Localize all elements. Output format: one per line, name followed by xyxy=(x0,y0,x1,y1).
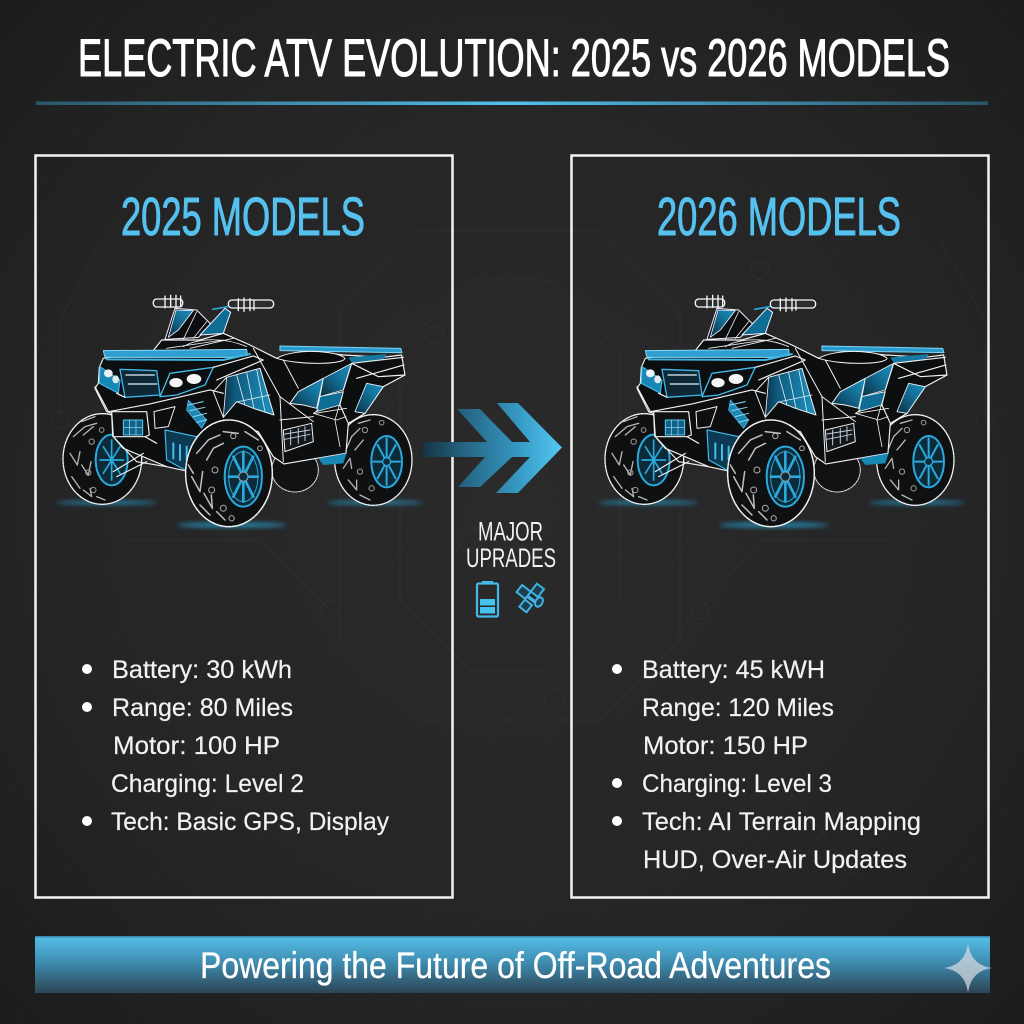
spec list 2025: Motor: 100 HP xyxy=(113,732,280,760)
illustration: 2025 ATV xyxy=(57,295,423,528)
arrow: upgrade direction xyxy=(423,403,562,493)
label: major upgrades xyxy=(466,516,556,573)
banner text: Powering the Future of Off-Road Adventures xyxy=(200,945,831,986)
label: major upgrades: UPRADES xyxy=(466,543,556,573)
spec list 2025: Range: 80 Miles xyxy=(112,694,293,722)
spec list 2026 xyxy=(612,656,921,874)
spec list 2025 xyxy=(82,656,389,836)
spec list 2026: Charging: Level 3 xyxy=(642,770,832,798)
panel: 2025 models xyxy=(36,156,452,898)
label: major upgrades: MAJOR xyxy=(478,516,543,546)
heading: 2025 models: 2025 MODELS xyxy=(121,187,365,247)
panel frame 2026 xyxy=(572,156,988,898)
heading: 2026 models: 2026 MODELS xyxy=(657,187,901,247)
spec list 2025: Charging: Level 2 xyxy=(111,770,304,798)
icon: satellite xyxy=(517,584,545,612)
spec list 2026: Range: 120 Miles xyxy=(642,694,834,722)
illustration: 2026 ATV xyxy=(599,295,965,528)
spec list 2026: Motor: 150 HP xyxy=(643,732,808,760)
spec list 2025: Tech: Basic GPS, Display xyxy=(111,808,389,836)
icon: battery xyxy=(477,581,498,616)
panel: 2026 models xyxy=(572,156,988,898)
spec list 2025: Battery: 30 kWh xyxy=(112,656,292,684)
icon: sparkle xyxy=(944,943,992,993)
spec list 2026: HUD, Over-Air Updates xyxy=(643,846,907,874)
spec list 2026: Battery: 45 kWH xyxy=(642,656,825,684)
panel frame 2025 xyxy=(36,156,452,898)
footer banner xyxy=(35,936,992,993)
spec list 2026: Tech: AI Terrain Mapping xyxy=(642,808,921,836)
title underline xyxy=(36,102,988,105)
